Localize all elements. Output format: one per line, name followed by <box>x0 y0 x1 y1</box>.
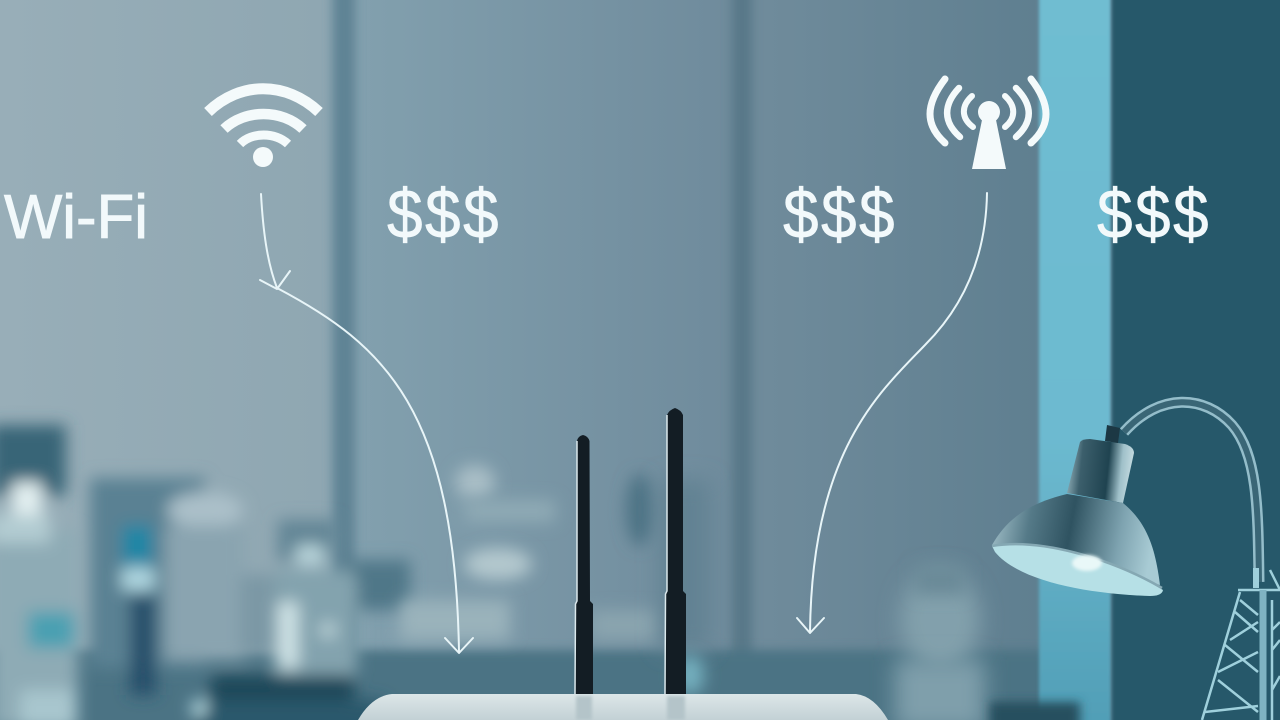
router body <box>358 694 888 720</box>
label: Wi-Fi: Wi-Fi <box>4 183 148 252</box>
lamp arm <box>1124 402 1259 582</box>
label: cost symbols, centre: $$$ <box>783 175 897 254</box>
label: cost symbols, left: $$$ <box>387 175 501 254</box>
icon: radio tower <box>930 79 1046 169</box>
background: blurred bottles <box>0 425 410 720</box>
lamp <box>992 402 1259 596</box>
lattice tower <box>1202 568 1280 720</box>
arrow: Wi-Fi icon to router <box>260 194 473 653</box>
left antenna <box>575 435 593 694</box>
lamp opening <box>992 544 1163 596</box>
lamp shade <box>992 494 1160 585</box>
arrow: tower icon to router <box>797 193 987 633</box>
background: blurred shapes behind router <box>400 465 1080 720</box>
right antenna <box>665 408 686 694</box>
lamp neck <box>1067 439 1134 503</box>
icon: Wi-Fi signal <box>208 89 319 167</box>
label: cost symbols, right: $$$ <box>1097 175 1211 254</box>
